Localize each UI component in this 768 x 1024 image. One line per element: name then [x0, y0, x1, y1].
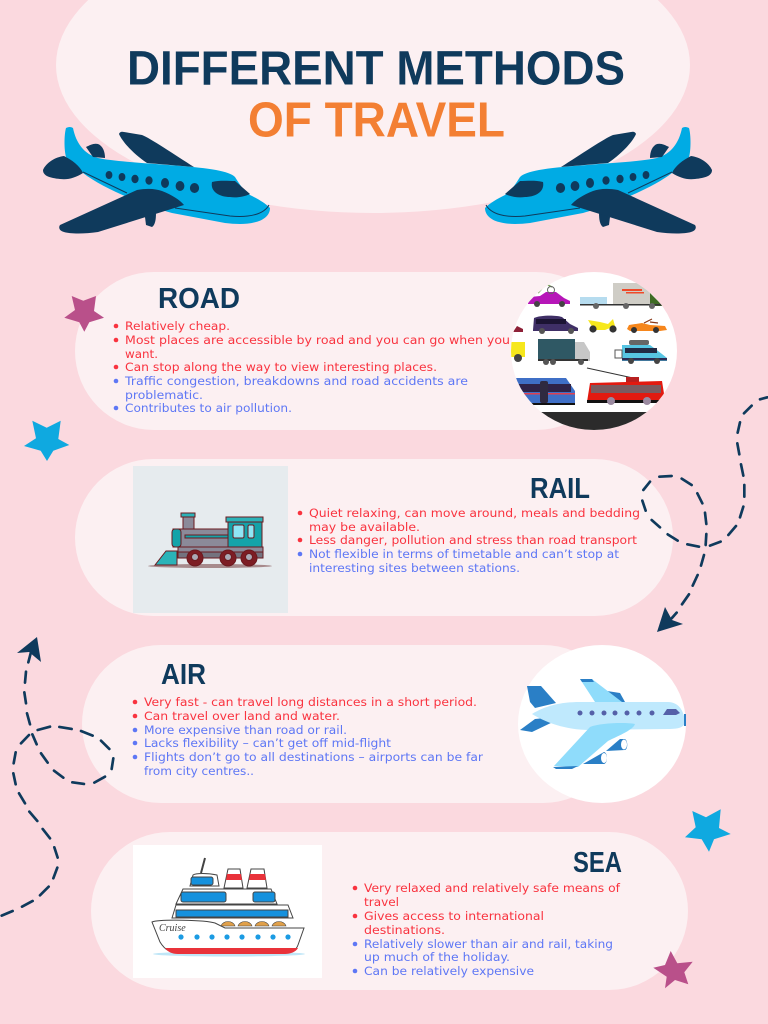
rail bullet list: Less danger, pollution and stress than road transport [309, 533, 638, 547]
sea bullet list: travel [364, 895, 399, 909]
dark van [533, 316, 578, 334]
rail bullet list: Quiet relaxing, can move around, meals and bedding [309, 506, 640, 520]
title: OF TRAVEL [248, 94, 505, 148]
red bit [513, 326, 523, 332]
dashed flight path: right [642, 397, 767, 618]
air image circle [518, 645, 686, 803]
road bullet list [114, 319, 510, 415]
icon: blue star right [685, 809, 731, 852]
road bullet list: Relatively cheap. [125, 319, 230, 333]
icon: pink star bottom right [653, 951, 693, 988]
panel: rail [75, 459, 673, 616]
icon: passenger plane [520, 679, 686, 769]
sea bullet list: Can be relatively expensive [364, 964, 534, 978]
yellow car [510, 342, 525, 362]
dark truck [538, 339, 590, 365]
motorcycle [588, 319, 617, 333]
arrowhead: left path [17, 637, 41, 662]
icon: pink star top left [64, 296, 104, 332]
air heading: AIR [161, 659, 206, 691]
rail heading: RAIL [530, 473, 590, 505]
sea bullet list: up much of the holiday. [364, 950, 510, 964]
air bullet list: More expensive than road or rail. [144, 723, 347, 737]
sea bullet list: Very relaxed and relatively safe means of [364, 881, 621, 895]
road heading: ROAD [158, 283, 240, 315]
sea image background [133, 845, 322, 978]
icon: left plane [43, 127, 270, 234]
rail bullet list [298, 506, 640, 575]
sea bullet list [353, 881, 621, 978]
road bullet list: want. [125, 347, 158, 361]
road bullet list: Contributes to air pollution. [125, 401, 292, 415]
passenger train [515, 378, 575, 405]
icon: cruise ship: Cruise [159, 923, 186, 934]
icon: cruise ship [152, 858, 305, 956]
rail bullet list: interesting sites between stations. [309, 561, 520, 575]
air bullet list: from city centres.. [144, 764, 254, 778]
blue van with roof rack [615, 340, 667, 364]
rail bullet list: Not flexible in terms of timetable and can’t stop at [309, 547, 620, 561]
panel: sea [91, 832, 688, 990]
dashed flight path: left [2, 653, 113, 916]
rail image background [133, 466, 288, 613]
sea bullet list: Gives access to international [364, 909, 544, 923]
road bullet list: Can stop along the way to view interesting places. [125, 360, 437, 374]
road panel background [75, 272, 615, 430]
icon: right plane [485, 127, 712, 234]
air bullet list [133, 695, 483, 778]
air bullet list: Very fast - can travel long distances in a short period. [144, 695, 477, 709]
sea heading: SEA [573, 847, 622, 879]
air bullet list: Lacks flexibility – can’t get off mid-flight [144, 736, 392, 750]
panel: air [82, 645, 686, 803]
road vehicles image [511, 272, 677, 430]
panel: road [75, 272, 615, 430]
road bullet list: Traffic congestion, breakdowns and road accidents are [124, 374, 468, 388]
title: DIFFERENT METHODS [127, 42, 625, 96]
title background ellipse [56, 0, 690, 213]
icon: blue star left [24, 421, 69, 461]
rail bullet list: may be available. [309, 520, 420, 534]
title [127, 42, 625, 148]
sea bullet list: destinations. [364, 923, 445, 937]
icon: locomotive [148, 513, 272, 568]
orange car [627, 319, 667, 333]
road bullet list: problematic. [125, 388, 203, 402]
air bullet list: Can travel over land and water. [144, 709, 340, 723]
box truck [580, 283, 663, 309]
road bullet list: Most places are accessible by road and you can go when you [125, 333, 510, 347]
rail panel background [75, 459, 673, 616]
red trolley bus [587, 368, 665, 405]
sea bullet list: Relatively slower than air and rail, taking [364, 937, 613, 951]
arrowhead: right path [657, 607, 683, 632]
sea panel background [91, 832, 688, 990]
air bullet list: Flights don’t go to all destinations – airports can be far [144, 750, 483, 764]
purple car [528, 284, 570, 307]
air panel background [82, 645, 622, 803]
